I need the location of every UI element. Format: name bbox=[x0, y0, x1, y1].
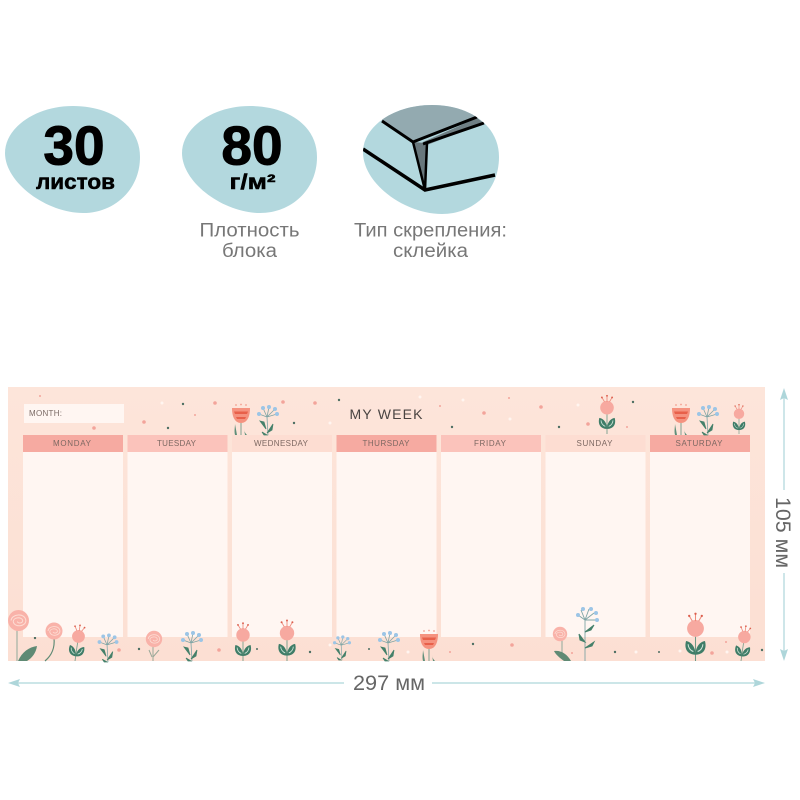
badge: glued binding icon bbox=[363, 100, 499, 214]
column: thursday bbox=[336, 435, 436, 637]
unit: sheets: листов bbox=[36, 171, 115, 194]
flowers: bottom row right bbox=[553, 607, 753, 662]
caption: binding type bbox=[354, 220, 507, 262]
arrow: height dimension bbox=[780, 388, 788, 661]
title: my week: MY WEEK bbox=[350, 406, 423, 422]
flowers: bottom row middle bbox=[333, 630, 438, 661]
column: monday: MONDAY bbox=[53, 439, 92, 448]
column: wednesday: WEDNESDAY bbox=[254, 439, 309, 448]
unit: g/m2: г/м² bbox=[230, 171, 276, 194]
badge: 30 sheets bbox=[5, 106, 140, 213]
caption: block density: блока bbox=[222, 241, 277, 262]
column: sunday: SUNDAY bbox=[576, 439, 613, 448]
column: friday: FRIDAY bbox=[474, 439, 507, 448]
speckled dots bbox=[34, 395, 763, 655]
label: 105 mm: 105 мм bbox=[771, 497, 794, 568]
number 30: 30 bbox=[43, 114, 105, 176]
column: friday bbox=[441, 435, 541, 637]
badge: 80 g/m2 bbox=[182, 106, 317, 213]
column: saturday bbox=[650, 435, 750, 637]
arrow: width dimension bbox=[8, 679, 765, 687]
column: wednesday bbox=[232, 435, 332, 637]
caption: block density: Плотность bbox=[200, 220, 300, 242]
column: monday bbox=[23, 435, 123, 637]
caption: binding type: склейка bbox=[393, 241, 468, 262]
column: sunday bbox=[546, 435, 646, 637]
number 80: 80 bbox=[221, 114, 283, 176]
column: thursday: THURSDAY bbox=[362, 439, 410, 448]
column: tuesday: TUESDAY bbox=[157, 439, 197, 448]
flowers: bottom row left bbox=[8, 610, 296, 662]
month field bbox=[24, 404, 124, 423]
caption: binding type: Тип скрепления: bbox=[354, 220, 507, 242]
flowers: top row bbox=[232, 395, 745, 435]
column: tuesday bbox=[128, 435, 228, 637]
column: saturday: SATURDAY bbox=[676, 439, 723, 448]
panel: weekly planner sheet bbox=[8, 387, 765, 662]
label: 297 mm: 297 мм bbox=[353, 672, 425, 695]
month field: MONTH: bbox=[29, 409, 62, 418]
caption: block density bbox=[200, 220, 300, 262]
